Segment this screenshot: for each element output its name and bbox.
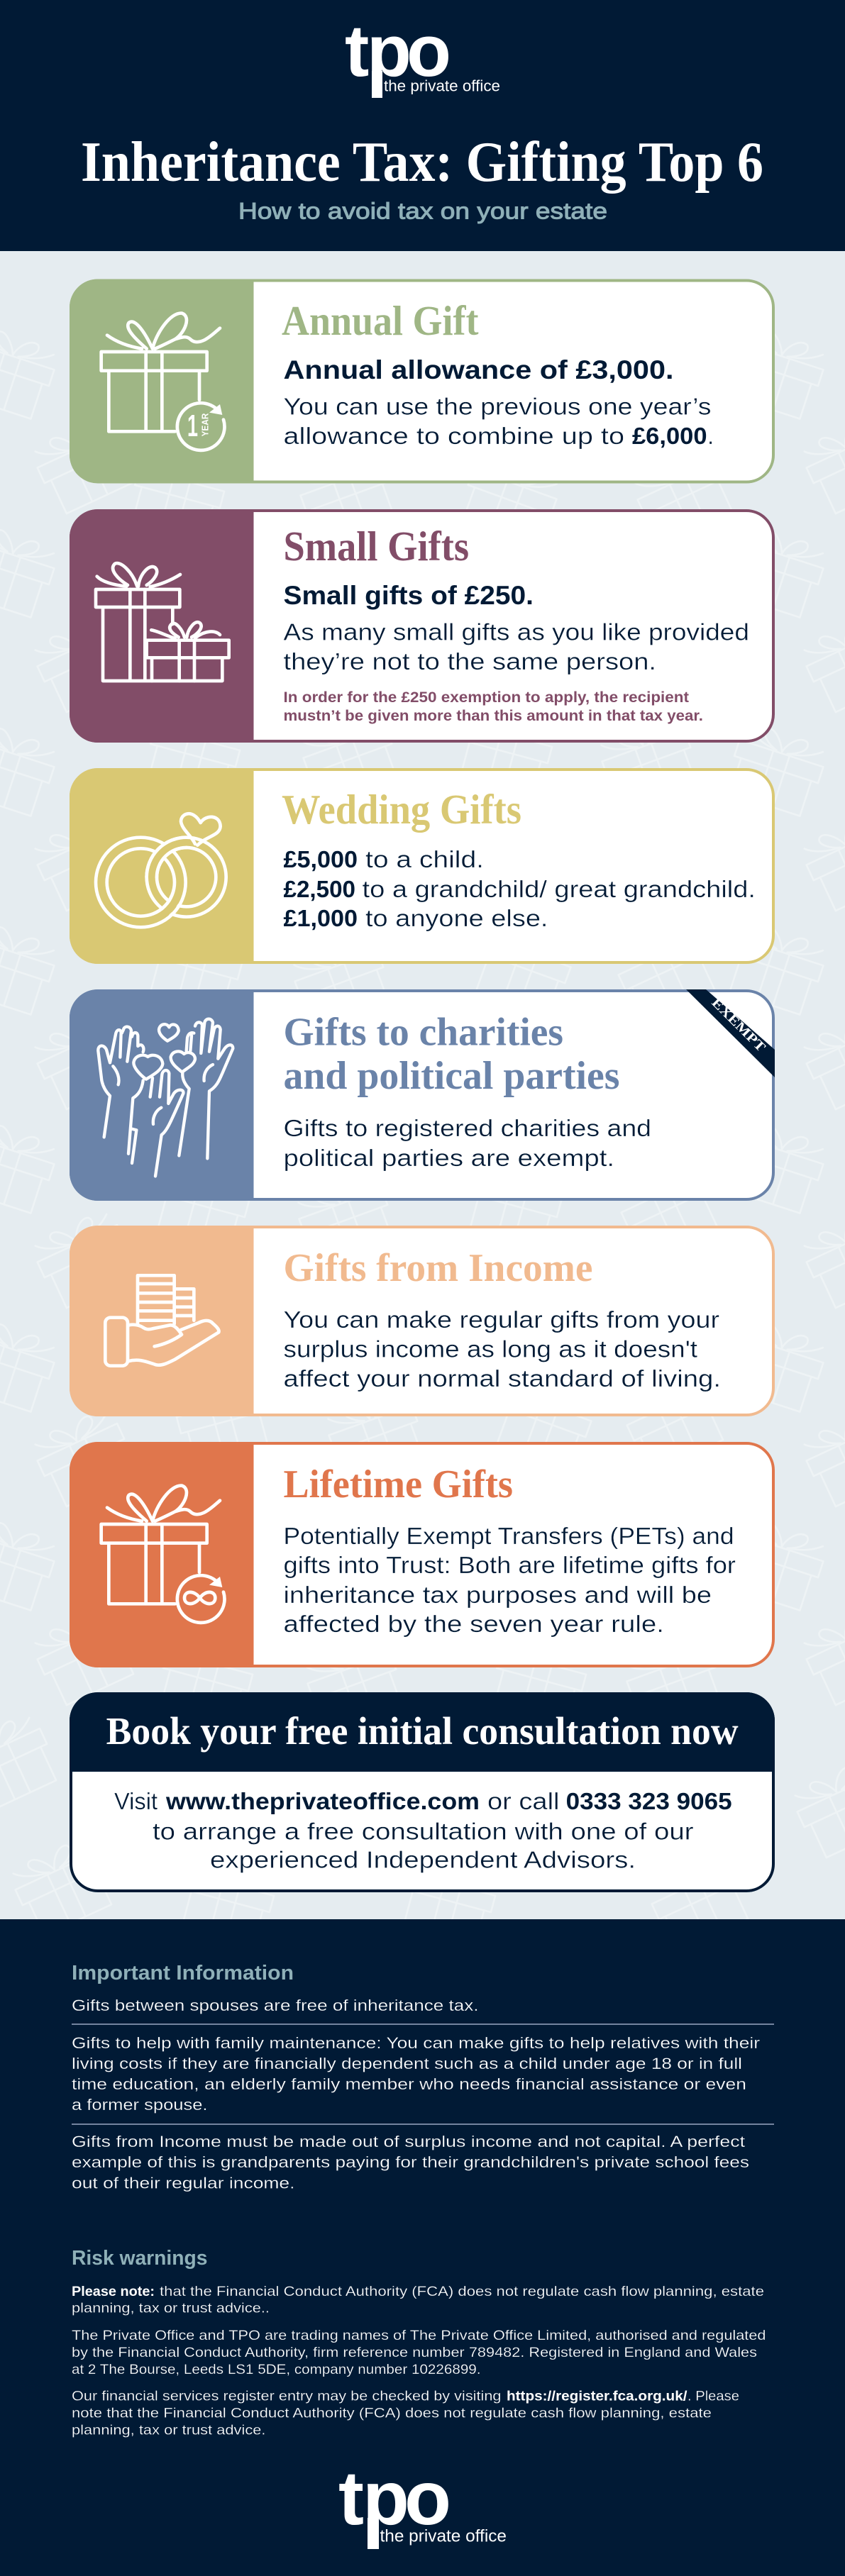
heading: Gifts to charities and political parties: and political parties bbox=[284, 1054, 620, 1098]
text: contact details: Visit bbox=[114, 1788, 158, 1814]
text: family maintenance: Gifts to help with family maintenance: You can make gifts to help relatives with their bbox=[72, 2034, 760, 2052]
text: allowance: Annual allowance of £3,000. bbox=[284, 355, 674, 384]
note: exemption condition: In order for the £250 exemption to apply, the recipient bbox=[284, 689, 689, 706]
text: contact details bbox=[114, 1788, 732, 1872]
text: wedding allowances bbox=[284, 846, 756, 931]
text: exempt gifts: Gifts to registered charities and bbox=[284, 1115, 651, 1141]
text: as many small gifts bbox=[284, 618, 749, 674]
text: family maintenance: a former spouse. bbox=[72, 2096, 207, 2114]
icon: gift with one year cycle: YEAR bbox=[199, 413, 210, 436]
icon: wedding rings and heart bbox=[96, 814, 226, 927]
text: trading names: by the Financial Conduct Authority, firm reference number 789482. Registered in England and Wales bbox=[72, 2345, 757, 2360]
text: contact details: experienced Independent Advisors. bbox=[210, 1847, 636, 1872]
heading: Gifts to charities and political parties: Gifts to charities bbox=[284, 1010, 563, 1054]
panel: Lifetime Gifts bbox=[70, 1442, 773, 1667]
text: register entry: . Please bbox=[687, 2389, 739, 2404]
text: please note: planning, tax or trust advice.. bbox=[72, 2301, 270, 2316]
text: spouses: Gifts between spouses are free of inheritance tax. bbox=[72, 1997, 478, 2014]
text: combine allowance: allowance to combine up to bbox=[284, 423, 624, 449]
icon: gift with one year cycle: 1 bbox=[187, 409, 198, 443]
corner ribbon: exempt: EXEMPT bbox=[709, 995, 768, 1055]
text: wedding allowances: to a grandchild/ great grandchild. bbox=[362, 876, 756, 902]
text: family maintenance: time education, an elderly family member who needs financial assistance or even bbox=[72, 2075, 746, 2093]
text: as many small gifts: they’re not to the same person. bbox=[284, 648, 656, 674]
heading: Risk warnings: Risk warnings bbox=[72, 2247, 207, 2270]
icon: two gifts bbox=[96, 563, 229, 681]
icon: raised hands and hearts bbox=[98, 1019, 233, 1176]
panel: Gifts from Income bbox=[70, 1226, 773, 1416]
text: trading names bbox=[72, 2328, 766, 2377]
text: please note bbox=[72, 2284, 764, 2316]
panel: call to action bbox=[70, 1692, 775, 1891]
text: wedding allowances: to anyone else. bbox=[365, 905, 548, 931]
text: exempt gifts: political parties are exempt. bbox=[284, 1145, 614, 1171]
text: combine allowance: £6,000 bbox=[632, 423, 707, 449]
text: wedding allowances: to a child. bbox=[365, 846, 484, 872]
text: PETs and trusts bbox=[284, 1523, 736, 1637]
text: regular gifts bbox=[284, 1306, 721, 1392]
panel: Small Gifts bbox=[70, 509, 773, 743]
icon: gift with one year cycle bbox=[101, 313, 224, 450]
note: exemption condition: mustn’t be given more than this amount in that tax year. bbox=[284, 708, 703, 724]
text: family maintenance bbox=[72, 2034, 760, 2114]
text: register entry: note that the Financial Conduct Authority (FCA) does not regulate cash flow planning, estate bbox=[72, 2406, 712, 2421]
note: exemption condition bbox=[284, 689, 703, 724]
header banner bbox=[0, 0, 845, 251]
icon: hand holding coins bbox=[105, 1275, 219, 1366]
text: gifts from income: Gifts from Income must be made out of surplus income and not capital. A perfect bbox=[72, 2133, 745, 2150]
text: gifts from income: out of their regular income. bbox=[72, 2175, 295, 2192]
text: register entry bbox=[72, 2389, 739, 2438]
text: as many small gifts: As many small gifts as you like provided bbox=[284, 618, 749, 645]
text: family maintenance: living costs if they are financially dependent such as a child under age 18 or in full bbox=[72, 2055, 742, 2072]
text: please note: Please note: bbox=[72, 2284, 155, 2299]
heading: Lifetime Gifts: Lifetime Gifts bbox=[284, 1462, 513, 1506]
panel: Wedding Gifts bbox=[70, 768, 773, 964]
text: register entry: https://register.fca.org.uk/ bbox=[507, 2389, 687, 2404]
logo: tpo the private office: the private office bbox=[384, 77, 500, 95]
text: gifts from income: example of this is grandparents paying for their grandchildren's private school fees bbox=[72, 2153, 749, 2171]
text: PETs and trusts: gifts into Trust: Both are lifetime gifts for bbox=[284, 1552, 736, 1578]
text: regular gifts: surplus income as long as it doesn't bbox=[284, 1336, 697, 1362]
heading: book consultation: Book your free initial consultation now bbox=[106, 1709, 739, 1753]
text: combine allowance bbox=[284, 393, 714, 449]
corner ribbon: exempt bbox=[686, 989, 775, 1077]
logo: footer tpo: tpo bbox=[338, 2455, 451, 2541]
panel: Annual Gift bbox=[70, 279, 773, 483]
text: wedding allowances: £2,500 bbox=[284, 876, 355, 902]
heading: Wedding Gifts: Wedding Gifts bbox=[282, 786, 521, 833]
logo: footer tpo: the private office bbox=[380, 2526, 507, 2546]
heading: Important Information: Important Information bbox=[72, 1962, 294, 1984]
text: wedding allowances: £1,000 bbox=[284, 905, 358, 931]
logo: tpo the private office: tpo bbox=[345, 10, 451, 91]
text: PETs and trusts: affected by the seven year rule. bbox=[284, 1611, 664, 1637]
heading: Gifts to charities and political parties bbox=[284, 1010, 620, 1098]
title: Inheritance Tax: Gifting Top 6 bbox=[81, 131, 763, 194]
text: trading names: The Private Office and TPO are trading names of The Private Office Limited, authorised and regulated bbox=[72, 2328, 766, 2343]
subtitle: How to avoid tax on your estate bbox=[238, 199, 607, 224]
heading: Small Gifts: Small Gifts bbox=[284, 523, 469, 570]
text: register entry: Our financial services register entry may be checked by visiting bbox=[72, 2389, 501, 2404]
heading: Annual Gift: Annual Gift bbox=[282, 297, 479, 344]
logo: footer tpo bbox=[338, 2455, 507, 2549]
text: combine allowance: . bbox=[707, 423, 714, 449]
text: trading names: at 2 The Bourse, Leeds LS1 5DE, company number 10226899. bbox=[72, 2362, 481, 2377]
background panel with gift pattern bbox=[0, 251, 845, 1953]
footer panel bbox=[0, 1919, 845, 2576]
text: contact details: to arrange a free consultation with one of our bbox=[153, 1819, 694, 1844]
text: contact details: or call bbox=[487, 1788, 559, 1814]
heading: Gifts from Income: Gifts from Income bbox=[284, 1246, 593, 1290]
text: regular gifts: affect your normal standard of living. bbox=[284, 1365, 721, 1392]
text: contact details: 0333 323 9065 bbox=[566, 1788, 732, 1814]
text: gifts from income bbox=[72, 2133, 749, 2192]
text: wedding allowances: £5,000 bbox=[284, 846, 358, 872]
text: PETs and trusts: Potentially Exempt Transfers (PETs) and bbox=[284, 1523, 734, 1549]
text: exempt gifts bbox=[284, 1115, 651, 1171]
icon: gift with infinity cycle bbox=[101, 1486, 224, 1623]
text: please note: that the Financial Conduct Authority (FCA) does not regulate cash flow planning, estate bbox=[160, 2284, 764, 2299]
text: combine allowance: You can use the previous one year’s bbox=[284, 393, 711, 420]
text: register entry: planning, tax or trust advice. bbox=[72, 2423, 265, 2438]
text: small gifts amount: Small gifts of £250. bbox=[284, 581, 534, 610]
text: PETs and trusts: inheritance tax purposes and will be bbox=[284, 1582, 712, 1608]
logo: tpo the private office bbox=[345, 10, 500, 98]
text: regular gifts: You can make regular gifts from your bbox=[284, 1306, 719, 1333]
text: contact details: www.theprivateoffice.com bbox=[165, 1788, 480, 1814]
panel: Gifts to charities and political parties bbox=[70, 989, 775, 1201]
